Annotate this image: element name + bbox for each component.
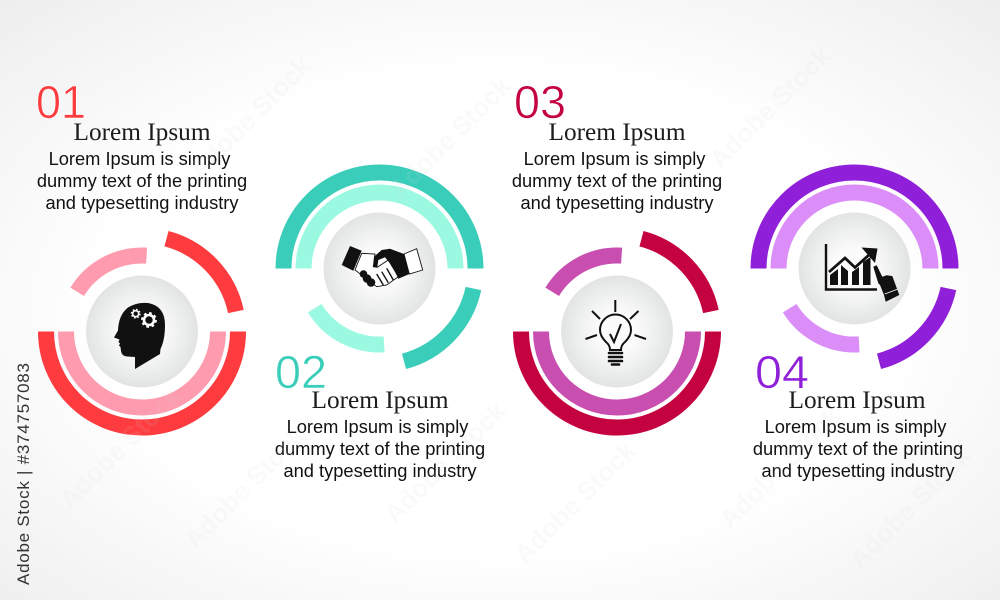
step 1 body text: dummy text of the printing: [37, 170, 247, 191]
step 1 number: 01: [36, 76, 86, 128]
step 2 body text: dummy text of the printing: [275, 438, 485, 459]
step 4 heading: Lorem Ipsum: [788, 386, 926, 414]
text: Adobe Stock: [378, 395, 512, 529]
text: Adobe Stock: [183, 50, 317, 184]
step 1 heading: Lorem Ipsum: [74, 118, 211, 146]
step 1 body text: Lorem Ipsum is simply: [49, 148, 231, 169]
step 2 body text: Lorem Ipsum is simply: [287, 416, 469, 437]
step 4 body text: and typesetting industry: [761, 460, 955, 481]
icon: chart with pointing hand: [826, 244, 899, 302]
text: Adobe Stock: [843, 440, 977, 574]
icon: head with gears: [114, 303, 165, 369]
text: Adobe Stock: [508, 435, 642, 569]
text: Adobe Stock: [178, 420, 312, 554]
step 3 number: 03: [514, 76, 566, 128]
step 3 ring chart: [521, 239, 713, 428]
step 3 body text: Lorem Ipsum is simply: [524, 148, 706, 169]
step 3 body text: and typesetting industry: [520, 192, 714, 213]
step 2 ring chart: [284, 172, 476, 361]
step 3 body text: dummy text of the printing: [512, 170, 722, 191]
step 4 number: 04: [755, 346, 809, 398]
step 4 body text: Lorem Ipsum is simply: [765, 416, 947, 437]
step 2 number: 02: [275, 346, 327, 398]
step 4 body text: dummy text of the printing: [753, 438, 963, 459]
text: Adobe Stock: [703, 40, 837, 174]
step 3 heading: Lorem Ipsum: [548, 118, 686, 146]
text: Adobe Stock: [383, 70, 517, 204]
text: Adobe Stock: [53, 380, 187, 514]
text: Adobe Stock: [713, 400, 847, 534]
icon: handshake: [342, 246, 423, 287]
step 1 body text: and typesetting industry: [45, 192, 239, 213]
icon: light bulb with check: [586, 300, 646, 364]
step 2 heading: Lorem Ipsum: [312, 386, 449, 414]
step 2 body text: and typesetting industry: [283, 460, 477, 481]
step 1 ring chart: [46, 239, 238, 428]
step 4 ring chart: [758, 172, 950, 361]
stock id side label: Adobe Stock | #374757083: [14, 363, 33, 585]
